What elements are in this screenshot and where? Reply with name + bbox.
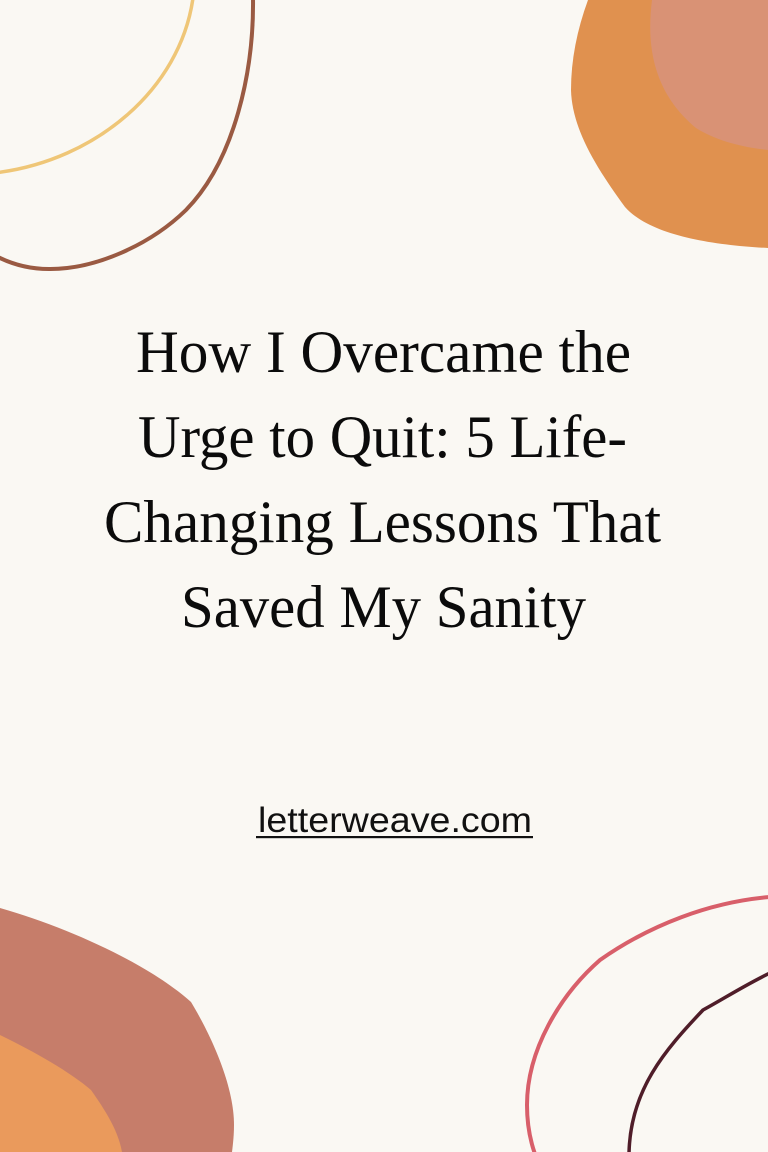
bottom-right dark curve (629, 973, 768, 1152)
title: Changing Lessons That (104, 489, 661, 555)
bottom-left terracotta blob (0, 908, 234, 1152)
bottom-right pink curve (527, 897, 768, 1152)
top-left yellow curve (0, 0, 193, 172)
title: Urge to Quit: 5 Life- (138, 404, 627, 470)
title: How I Overcame the (136, 319, 631, 385)
top-right orange blob (571, 0, 768, 248)
top-right pink blob (650, 0, 768, 150)
title: Saved My Sanity (181, 574, 586, 640)
website link: letterweave.com (258, 801, 532, 840)
title (104, 319, 661, 640)
bottom-left orange blob (0, 1035, 122, 1152)
top-left brown curve (0, 0, 253, 269)
